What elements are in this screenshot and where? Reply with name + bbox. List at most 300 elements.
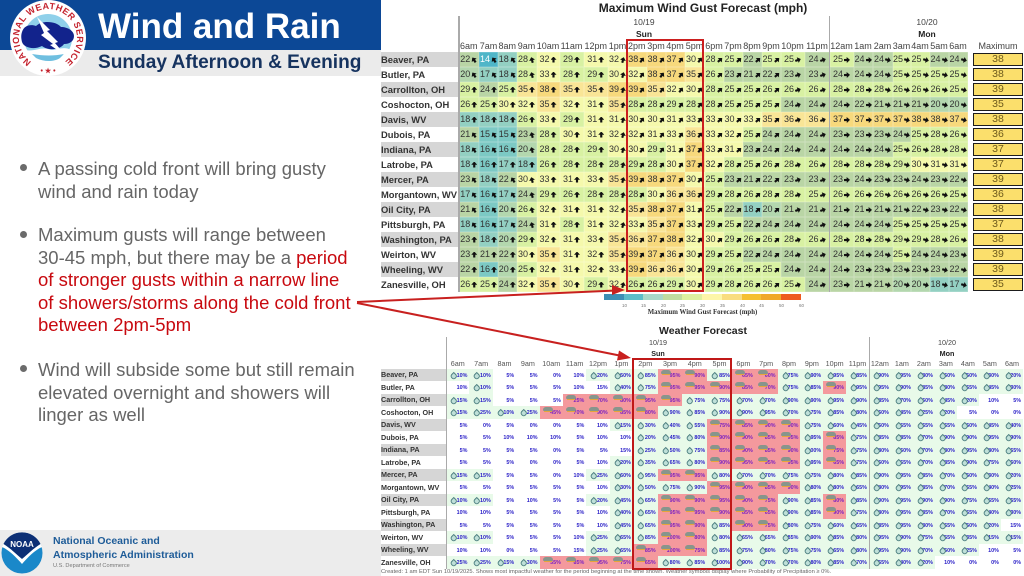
wind gust table: 22 xyxy=(460,264,470,274)
weather forecast table: 45% xyxy=(856,422,867,428)
wind gust table: 30 xyxy=(647,114,658,124)
weather forecast table: 5% xyxy=(460,485,467,491)
wind gust table: Davis, WV xyxy=(381,114,426,125)
wind gust table: 25 xyxy=(499,84,509,94)
wind gust table: 30 xyxy=(705,234,716,244)
weather forecast table: 85% xyxy=(900,435,911,441)
weather forecast table: 70% xyxy=(788,410,798,416)
wind gust table: 20 xyxy=(911,279,922,289)
wind gust table: 23 xyxy=(893,264,903,274)
weather forecast table: 80% xyxy=(988,448,999,454)
wind gust table: 26 xyxy=(743,234,754,244)
weather forecast table: 50% xyxy=(966,522,977,528)
weather forecast table: 15% xyxy=(480,398,491,404)
weather forecast table: 85% xyxy=(645,372,656,378)
wind gust table: 2am xyxy=(874,40,891,50)
weather forecast table: 65% xyxy=(742,535,753,541)
wind gust table: 23 xyxy=(911,264,922,274)
wind gust table: 25 xyxy=(911,54,922,64)
weather forecast table: 80% xyxy=(719,472,730,478)
wind gust table: 12am xyxy=(830,40,853,50)
bullet 3 text xyxy=(38,359,355,425)
wind gust table: 35 xyxy=(647,84,658,94)
wind gust table: 20 xyxy=(499,234,509,244)
wind gust colour legend: 50 xyxy=(779,303,784,308)
weather forecast table: 5% xyxy=(530,548,538,554)
weather forecast table: 90% xyxy=(788,398,798,404)
wind gust table: 28 xyxy=(949,144,960,154)
wind gust table: 28 xyxy=(930,234,940,244)
wind gust colour legend: 10 xyxy=(622,303,627,308)
weather forecast table: 5% xyxy=(553,510,561,516)
weather forecast table: Oil City, PA xyxy=(381,495,419,504)
wind gust table: 26 xyxy=(539,159,550,169)
wind gust table: 28 xyxy=(609,189,619,199)
wind gust table: 32 xyxy=(563,99,573,109)
wind gust table: 35 xyxy=(647,219,658,229)
wind gust table: 33 xyxy=(628,219,638,229)
weather forecast table: 80% xyxy=(645,410,656,416)
bullet 2 text: between 2pm-5pm xyxy=(38,314,191,335)
wind gust table: 26 xyxy=(518,204,528,214)
weather forecast table: 25% xyxy=(457,560,467,566)
weather forecast table: 10% xyxy=(480,535,491,541)
wind gust table: 31 xyxy=(587,204,597,214)
weather forecast table: 25% xyxy=(645,448,656,454)
wind gust table: 33 xyxy=(539,114,550,124)
weather forecast table: 90% xyxy=(597,410,608,416)
wind gust table: 28 xyxy=(587,159,597,169)
weather forecast table: 5% xyxy=(506,422,514,428)
maximum column values: 37 xyxy=(992,142,1004,154)
text: 60 xyxy=(799,303,804,308)
wind gust table xyxy=(381,40,968,292)
weather forecast table: 95% xyxy=(788,435,798,441)
weather forecast table: Davis, WV xyxy=(381,420,416,429)
weather forecast table: 10% xyxy=(457,535,467,541)
wind gust table: 33 xyxy=(539,69,550,79)
weather forecast table: 15% xyxy=(457,410,467,416)
wind gust table: 33 xyxy=(666,129,676,139)
wind gust table: 32 xyxy=(539,264,550,274)
weather forecast table: 90% xyxy=(788,498,798,504)
weather forecast table: 80% xyxy=(856,548,867,554)
wind gust table: 26 xyxy=(911,144,922,154)
weather forecast table: 3pm xyxy=(663,358,677,368)
wind gust table: 30 xyxy=(609,144,619,154)
weather forecast table: 30% xyxy=(620,485,631,491)
wind gust table: 36 xyxy=(666,249,676,259)
wind gust table: 25 xyxy=(893,144,903,154)
weather forecast table: 5% xyxy=(460,448,467,454)
weather forecast table: 50% xyxy=(966,472,977,478)
weather forecast table: 75% xyxy=(670,485,680,491)
wind gust table: 32 xyxy=(628,129,638,139)
weather forecast table: 45% xyxy=(620,522,631,528)
weather forecast table: 80% xyxy=(788,522,798,528)
wind gust table: 30 xyxy=(647,189,658,199)
wind gust table: 28 xyxy=(563,69,573,79)
wind gust colour legend: Maximum Wind Gust Forecast (mph) xyxy=(648,309,757,316)
wind gust table: 38 xyxy=(911,114,922,124)
wind gust table: 25 xyxy=(743,264,754,274)
wind gust table: 25 xyxy=(762,54,772,64)
wind gust table: 38 xyxy=(539,84,550,94)
wind gust table: 24 xyxy=(808,99,818,109)
weather forecast table: 65% xyxy=(900,422,911,428)
weather forecast table: 65% xyxy=(645,498,656,504)
weather forecast table: 95% xyxy=(810,460,821,466)
weather forecast table: 8pm xyxy=(782,358,796,368)
wind gust table: 21 xyxy=(808,204,818,214)
wind gust table: 35 xyxy=(609,249,619,259)
weather forecast table: 0% xyxy=(483,422,491,428)
weather forecast table: 65% xyxy=(944,422,955,428)
wind gust table: 25 xyxy=(949,189,960,199)
wind gust table: 24 xyxy=(949,54,960,64)
weather forecast table: 5% xyxy=(460,522,467,528)
weather forecast table: 70% xyxy=(765,472,776,478)
weather forecast table: 90% xyxy=(742,410,753,416)
wind gust table: 24 xyxy=(874,219,884,229)
wind gust table: 36 xyxy=(666,264,676,274)
wind gust table: 23 xyxy=(949,249,960,259)
wind gust table: 28 xyxy=(762,189,772,199)
wind gust table: Dubois, PA xyxy=(381,129,430,140)
wind gust table: Carrollton, OH xyxy=(381,84,445,95)
wind gust table: 31 xyxy=(666,144,676,154)
wind gust table: 35 xyxy=(762,114,772,124)
maximum column values: 35 xyxy=(992,278,1004,290)
weather forecast table: 75% xyxy=(856,510,867,516)
header band xyxy=(0,0,381,50)
weather forecast table: Wheeling, WV xyxy=(381,545,429,554)
weather forecast table: 80% xyxy=(878,485,889,491)
weather forecast table: 10% xyxy=(527,435,538,441)
wind gust table: 23 xyxy=(784,69,794,79)
weather forecast table: 15% xyxy=(1010,535,1021,541)
weather forecast table: 40% xyxy=(1010,422,1021,428)
wind gust table: Butler, PA xyxy=(381,69,425,80)
wind gust table: 25 xyxy=(724,99,734,109)
icon: NOAA logo xyxy=(2,532,42,574)
weather forecast table: 10% xyxy=(574,472,584,478)
weather forecast table: 95% xyxy=(694,472,705,478)
wind gust table: 25 xyxy=(930,219,940,229)
weather forecast table: Morgantown, WV xyxy=(381,482,439,492)
wind gust table: 26 xyxy=(949,234,960,244)
weather forecast table: 80% xyxy=(670,560,680,566)
wind gust table: 29 xyxy=(460,84,470,94)
weather forecast table: 10% xyxy=(574,385,584,391)
wind gust table: 37 xyxy=(666,219,676,229)
weather forecast table: 10% xyxy=(597,485,608,491)
wind gust table: 25 xyxy=(762,264,772,274)
wind gust table: Weirton, WV xyxy=(381,249,436,260)
weather forecast table: 70% xyxy=(742,398,753,404)
weather forecast table: 95% xyxy=(878,548,889,554)
weather forecast table: 60% xyxy=(833,522,844,528)
weather forecast table: 5% xyxy=(483,460,491,466)
weather forecast table: 95% xyxy=(765,410,776,416)
weather forecast table: 95% xyxy=(765,460,776,466)
weather forecast table: 75% xyxy=(645,385,656,391)
wind gust table: 28 xyxy=(705,84,716,94)
wind gust table: 24 xyxy=(499,279,509,289)
wind gust table: 23 xyxy=(930,204,940,214)
wind gust table: 26 xyxy=(518,114,528,124)
weather forecast table: 80% xyxy=(833,498,844,504)
weather forecast table: Indiana, PA xyxy=(381,445,420,454)
wind gust table: 24 xyxy=(784,264,794,274)
weather forecast table: 70% xyxy=(922,548,933,554)
weather forecast table: 25% xyxy=(597,548,608,554)
weather forecast table: 5% xyxy=(460,422,467,428)
wind gust table: Oil City, PA xyxy=(381,204,431,215)
weather forecast table: 20% xyxy=(988,522,999,528)
wind gust table: Washington, PA xyxy=(381,234,452,245)
weather forecast table: 65% xyxy=(856,522,867,528)
wind gust table: 21 xyxy=(460,129,470,139)
department line: U.S. Department of Commerce xyxy=(53,563,130,569)
wind gust table: 26 xyxy=(628,279,638,289)
wind gust table: 35 xyxy=(539,279,550,289)
wind gust table: 3am xyxy=(893,40,910,50)
wind gust table: 17 xyxy=(460,189,470,199)
weather forecast table: 0% xyxy=(1013,560,1021,566)
wind date Monday xyxy=(916,17,938,39)
wind gust table: 26 xyxy=(762,84,772,94)
weather forecast table: 5% xyxy=(553,548,561,554)
wind gust table: 16 xyxy=(480,189,490,199)
wind gust table: 24 xyxy=(930,54,940,64)
wind gust table: 25 xyxy=(833,54,843,64)
weather forecast table: 20% xyxy=(922,560,933,566)
wind gust table: 32 xyxy=(686,234,696,244)
weather forecast table: 95% xyxy=(694,510,705,516)
wind gust table: 33 xyxy=(705,144,716,154)
weather forecast table: 12pm xyxy=(589,358,607,368)
wind gust table: 32 xyxy=(724,129,734,139)
weather forecast table: 9pm xyxy=(805,358,819,368)
weather forecast table: 90% xyxy=(719,385,730,391)
weather forecast table: 90% xyxy=(742,522,753,528)
wind gust table: 31 xyxy=(587,219,597,229)
weather forecast table: 11am xyxy=(566,358,583,368)
weather forecast table: 20% xyxy=(620,460,631,466)
weather forecast table: 10% xyxy=(457,498,467,504)
wind gust table: 23 xyxy=(743,144,754,154)
wind gust table: 28 xyxy=(647,159,658,169)
weather forecast table: 95% xyxy=(719,485,730,491)
weather forecast table: 60% xyxy=(765,372,776,378)
wind gust table: 28 xyxy=(874,159,884,169)
wind gust table: 25 xyxy=(724,54,734,64)
wind gust table: 30 xyxy=(686,54,696,64)
weather forecast table: 6am xyxy=(451,358,465,368)
wind gust table: 26 xyxy=(893,84,903,94)
weather forecast table: 85% xyxy=(944,460,955,466)
weather separator 6am xyxy=(446,337,447,569)
weather forecast table: 95% xyxy=(856,385,867,391)
weather forecast table: 25% xyxy=(1010,485,1021,491)
weather forecast table: 5% xyxy=(530,372,538,378)
wind gust table: 6am xyxy=(949,40,967,50)
wind gust table: 5pm xyxy=(686,40,703,50)
wind gust table: 24 xyxy=(854,219,864,229)
weather forecast table: 90% xyxy=(694,498,705,504)
weather forecast table: 85% xyxy=(833,435,844,441)
weather forecast table: 70% xyxy=(597,398,608,404)
wind gust table: 21 xyxy=(911,99,922,109)
maximum column values: 35 xyxy=(992,98,1004,110)
weather forecast table: 30% xyxy=(988,472,999,478)
wind gust table: 24 xyxy=(874,54,884,64)
wind gust table: 17 xyxy=(499,189,509,199)
wind gust table: 20 xyxy=(499,264,509,274)
weather forecast table: 90% xyxy=(810,535,821,541)
weather forecast table: 65% xyxy=(966,510,977,516)
weather forecast table: Mercer, PA xyxy=(381,470,418,479)
weather forecast table: 90% xyxy=(878,372,889,378)
weather forecast table: 95% xyxy=(833,372,844,378)
weather forecast table: 85% xyxy=(620,410,631,416)
weather forecast table: 25% xyxy=(480,560,491,566)
maximum column values: 36 xyxy=(992,128,1004,140)
wind gust table: 29 xyxy=(724,234,734,244)
wind gust table: 29 xyxy=(666,99,676,109)
weather forecast table: 95% xyxy=(597,560,608,566)
weather forecast table: 12am xyxy=(871,358,889,368)
weather forecast table: 85% xyxy=(694,410,705,416)
wind gust table: 28 xyxy=(833,234,843,244)
weather forecast table: 85% xyxy=(742,510,753,516)
weather date Monday: Mon xyxy=(940,349,954,358)
bullet 2 text: of showers/storms along the cold front xyxy=(38,292,351,312)
wind gust table: 24 xyxy=(833,99,843,109)
wind gust table: 38 xyxy=(647,204,658,214)
weather forecast table: Beaver, PA xyxy=(381,370,418,379)
wind gust table: 28 xyxy=(563,219,573,229)
weather forecast table: 85% xyxy=(719,448,730,454)
wind gust table: 24 xyxy=(833,249,843,259)
wind gust table: 16 xyxy=(480,159,490,169)
wind gust table: 1pm xyxy=(609,40,626,50)
wind gust table: 25 xyxy=(893,249,903,259)
weather forecast table: 45% xyxy=(900,410,911,416)
wind gust table: 32 xyxy=(628,69,638,79)
wind gust table: 24 xyxy=(874,69,884,79)
weather forecast table: 70% xyxy=(944,510,955,516)
weather forecast table: 0% xyxy=(553,422,561,428)
weather forecast table: 30% xyxy=(988,372,999,378)
weather forecast table: 85% xyxy=(810,498,821,504)
weather forecast table: 50% xyxy=(645,485,656,491)
wind gust table: 23 xyxy=(460,249,470,259)
weather forecast table: 10am xyxy=(542,358,560,368)
wind gust table: 25 xyxy=(784,54,794,64)
wind gust table: 26 xyxy=(460,279,470,289)
wind gust table: 23 xyxy=(833,129,843,139)
weather forecast table: 65% xyxy=(645,560,656,566)
wind gust table: 31 xyxy=(539,219,550,229)
weather forecast table: 40% xyxy=(670,422,680,428)
wind gust table: 38 xyxy=(647,69,658,79)
wind gust table: 24 xyxy=(784,144,794,154)
wind gust table: 23 xyxy=(784,174,794,184)
weather forecast table: 10% xyxy=(480,548,491,554)
weather forecast table: 5% xyxy=(483,485,491,491)
weather forecast table: 100% xyxy=(716,560,730,566)
wind gust table: 28 xyxy=(854,234,864,244)
wind gust table: 23 xyxy=(460,234,470,244)
wind gust table: 22 xyxy=(460,54,470,64)
wind gust table: 29 xyxy=(705,219,716,229)
maximum column values: 39 xyxy=(992,82,1004,94)
wind gust table: 23 xyxy=(724,174,734,184)
weather forecast table: 30% xyxy=(1010,385,1021,391)
wind gust table: 25 xyxy=(893,69,903,79)
weather forecast table: Carrollton, OH xyxy=(381,395,430,404)
wind gust table: 25 xyxy=(949,84,960,94)
wind gust table: 32 xyxy=(609,54,619,64)
weather chart title: Weather Forecast xyxy=(659,325,747,337)
wind gust table: 25 xyxy=(911,219,922,229)
wind gust table: 7pm xyxy=(724,40,742,50)
weather forecast table: 10% xyxy=(944,560,955,566)
wind gust table: 20 xyxy=(949,99,960,109)
weather forecast table: 10pm xyxy=(826,358,844,368)
wind gust table: 10pm xyxy=(781,40,804,50)
weather forecast table: 90% xyxy=(922,498,933,504)
wind gust table: 11am xyxy=(561,40,582,50)
wind gust table: 29 xyxy=(518,234,528,244)
weather forecast table: 30% xyxy=(527,560,538,566)
weather forecast table: 5% xyxy=(530,522,538,528)
weather forecast table: 15% xyxy=(503,560,514,566)
weather forecast table: 90% xyxy=(878,472,889,478)
wind gust table: 31 xyxy=(563,174,573,184)
wind gust table: 33 xyxy=(686,219,696,229)
weather forecast table: 70% xyxy=(765,560,776,566)
weather forecast table: 90% xyxy=(742,435,753,441)
weather forecast table: 90% xyxy=(719,460,730,466)
weather forecast table: 60% xyxy=(922,398,933,404)
wind gust table: 8pm xyxy=(743,40,761,50)
weather forecast table: 15% xyxy=(574,548,584,554)
wind gust table: 37 xyxy=(854,114,864,124)
wind gust table: 24 xyxy=(833,69,843,79)
wind gust colour legend: 20 xyxy=(661,303,666,308)
bullet 1 marker xyxy=(20,164,27,171)
weather forecast table: 80% xyxy=(694,435,705,441)
wind gust table: 24 xyxy=(518,219,528,229)
wind gust table: 39 xyxy=(628,264,638,274)
wind gust table: 31 xyxy=(930,159,940,169)
weather forecast table: 5% xyxy=(530,398,538,404)
maximum column values: 38 xyxy=(992,52,1004,64)
weather forecast table: 65% xyxy=(645,510,656,516)
bullet 3 text: linger as well xyxy=(38,404,145,425)
weather forecast table: 75% xyxy=(922,535,933,541)
weather forecast table: 75% xyxy=(810,522,821,528)
wind gust table: 35 xyxy=(686,69,696,79)
weather forecast table: 75% xyxy=(788,385,798,391)
wind gust table: 29 xyxy=(587,144,597,154)
weather date Sunday: 10/19 xyxy=(649,338,667,347)
weather forecast table: 65% xyxy=(833,460,844,466)
wind gust table: 21 xyxy=(784,204,794,214)
